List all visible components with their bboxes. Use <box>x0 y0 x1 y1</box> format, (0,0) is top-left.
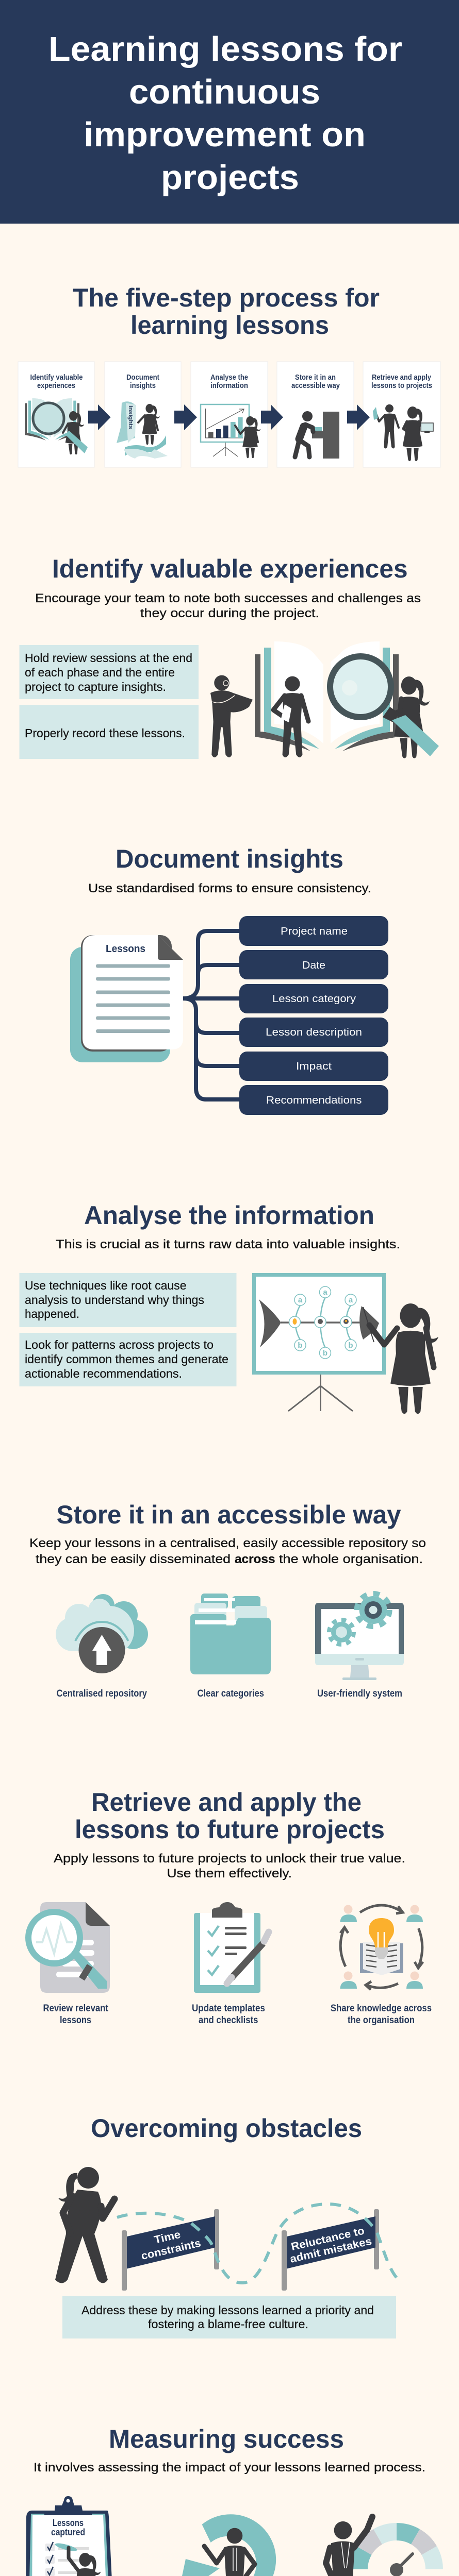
callout: review sessions <box>20 645 199 699</box>
section heading: document insights <box>88 844 371 895</box>
section heading: identify valuable experiences: Identify valuable experiences <box>52 554 408 583</box>
header banner with title: continuous <box>129 73 320 111</box>
section heading: document insights: Document insights <box>116 844 343 873</box>
icon: lessons document: Lessons <box>106 943 145 955</box>
section heading: analyse the information: Analyse the information <box>84 1201 374 1230</box>
section heading: measuring success: Measuring success <box>109 2425 344 2453</box>
label: user-friendly system: User-friendly system <box>317 1688 402 1699</box>
section heading: measuring success: It involves assessing the impact of your lessons learned process. <box>34 2461 425 2475</box>
callout: review sessions: Hold review sessions at the end <box>25 651 192 665</box>
icon: document with magnifier <box>28 1902 110 1993</box>
section heading: store it: they can be easily disseminated <box>36 1552 231 1566</box>
callout: review sessions: of each phase and the entire <box>25 666 175 679</box>
illustration: woman and barriers <box>55 2167 400 2291</box>
barrier: reluctance <box>282 2209 379 2291</box>
woman walking <box>55 2167 114 2283</box>
step card: document insights: Document <box>126 374 159 382</box>
callout: address obstacles: Address these by making lessons learned a priority and <box>81 2303 374 2317</box>
section heading: identify valuable experiences: Encourage your team to note both successes and challenges as <box>35 591 421 605</box>
barrier: reluctance: Reluctance to <box>290 2225 366 2253</box>
field: lesson description: Lesson description <box>266 1027 362 1038</box>
section heading: store it <box>29 1500 426 1566</box>
callout: root cause analysis <box>20 1273 236 1327</box>
step card: analyse the information: Analyse the <box>210 374 248 382</box>
field: project name: Project name <box>281 926 348 937</box>
header banner with title <box>0 0 459 224</box>
fishbone diagram: b <box>323 1349 327 1358</box>
icon: lessons document <box>70 935 183 1062</box>
section heading: retrieve and apply: Use them effectively. <box>167 1867 292 1880</box>
callout: patterns: actionable recommendations. <box>25 1367 182 1380</box>
header banner with title: improvement on <box>84 115 366 154</box>
step card: document insights: Insights <box>127 405 134 429</box>
fishbone diagram: b <box>348 1341 353 1350</box>
fishbone diagram <box>259 1286 379 1359</box>
field: lesson category: Lesson category <box>272 993 356 1005</box>
step card: analyse the information <box>191 362 268 467</box>
section heading: retrieve and apply: Apply lessons to future projects to unlock their true value. <box>54 1852 405 1866</box>
header banner with title: projects <box>161 158 299 197</box>
barrier: time constraints <box>122 2209 219 2291</box>
label: share knowledge <box>331 2003 432 2026</box>
five-step process diagram <box>18 362 440 467</box>
field: project name <box>239 916 388 946</box>
callout: patterns <box>20 1333 236 1386</box>
step card: identify valuable experiences <box>18 362 94 467</box>
section heading: identify valuable experiences <box>35 554 421 620</box>
label: clear categories: Clear categories <box>197 1688 264 1699</box>
step card: identify valuable experiences: Identify valuable <box>30 374 83 382</box>
fishbone diagram: a <box>349 1296 353 1304</box>
callout: record lessons: Properly record these lessons. <box>25 726 185 740</box>
icon: lessons captured clipboard: captured <box>51 2527 85 2537</box>
field: date: Date <box>302 960 325 971</box>
arrow 3 <box>261 404 283 430</box>
label: share knowledge: Share knowledge across <box>331 2003 432 2014</box>
step card: document insights <box>105 362 181 467</box>
callout: review sessions: project to capture insights. <box>25 680 166 693</box>
field: impact: Impact <box>296 1061 332 1072</box>
icon: lessons captured clipboard <box>26 2496 113 2576</box>
icon: gauge with man <box>326 2517 443 2576</box>
man with glasses <box>210 675 253 757</box>
section heading: store it: across <box>235 1552 275 1566</box>
woman holding magnifier <box>389 676 430 758</box>
callout: root cause analysis: Use techniques like root cause <box>25 1279 187 1292</box>
icon: folders <box>190 1594 271 1674</box>
label: centralised repository: Centralised repository <box>57 1688 147 1699</box>
section heading: identify valuable experiences: they occur during the project. <box>140 606 319 620</box>
section heading: retrieve and apply: lessons to future projects <box>75 1815 385 1844</box>
label: review relevant lessons <box>43 2003 109 2026</box>
dashed path <box>117 2204 400 2283</box>
step card: analyse the information: information <box>210 382 248 390</box>
icon: share knowledge <box>340 1905 423 1990</box>
step card: retrieve and apply lessons: lessons to projects <box>371 382 432 390</box>
step card: store it in an accessible way: accessible way <box>291 382 340 390</box>
field: recommendations <box>239 1085 388 1115</box>
centre man with notebook <box>273 676 308 757</box>
label: share knowledge: the organisation <box>348 2015 415 2026</box>
label: update templates: Update templates <box>192 2003 265 2014</box>
step card: store it in an accessible way <box>277 362 354 467</box>
arrow 1 <box>88 404 110 430</box>
field: impact <box>239 1052 388 1081</box>
section heading: store it: the whole organisation. <box>279 1552 423 1566</box>
fishbone diagram: a <box>323 1288 327 1297</box>
step card: retrieve and apply lessons: Retrieve and apply <box>372 374 431 382</box>
connector tree <box>183 931 239 1099</box>
section heading: document insights: Use standardised forms to ensure consistency. <box>88 882 371 895</box>
icon: cloud upload <box>56 1594 148 1673</box>
label: review relevant lessons: Review relevant <box>43 2003 109 2014</box>
callout: record lessons <box>20 705 199 759</box>
fishbone diagram: b <box>298 1341 303 1350</box>
section heading: analyse the information: This is crucial as it turns raw data into valuable insights. <box>56 1238 400 1251</box>
step card: document insights: insights <box>130 382 156 390</box>
label: review relevant lessons: lessons <box>60 2015 91 2026</box>
presenter woman <box>363 1303 438 1414</box>
icon: clipboard checklist <box>194 1902 269 1993</box>
barrier: time constraints: constraints <box>140 2237 202 2262</box>
heading: five-step process: The five-step process for <box>73 283 380 312</box>
field: recommendations: Recommendations <box>266 1095 362 1106</box>
form fields list <box>239 916 388 1115</box>
icon: monitor with gears <box>315 1594 404 1680</box>
callout: root cause analysis: happened. <box>25 1307 79 1320</box>
icon: lessons captured clipboard: Lessons <box>53 2518 84 2528</box>
heading: five-step process: learning lessons <box>130 311 329 340</box>
field: date <box>239 950 388 979</box>
heading: five-step process <box>73 283 380 340</box>
label: update templates: and checklists <box>199 2015 258 2026</box>
arrow 2 <box>174 404 197 430</box>
section heading: overcoming obstacles: Overcoming obstacles <box>91 2114 362 2143</box>
section heading: measuring success <box>34 2425 425 2475</box>
callout: address obstacles <box>62 2296 396 2338</box>
field: lesson category <box>239 984 388 1013</box>
callout: address obstacles: fostering a blame-free culture. <box>148 2317 308 2331</box>
step card: identify valuable experiences: experiences <box>37 382 75 390</box>
step card: store it in an accessible way: Store it in an <box>295 374 336 382</box>
section heading: retrieve and apply: Retrieve and apply the <box>91 1788 362 1817</box>
barrier: time constraints: Time <box>153 2229 182 2246</box>
barrier: reluctance: admit mistakes <box>289 2235 373 2265</box>
woman writing <box>69 2548 101 2576</box>
field: lesson description <box>239 1018 388 1047</box>
section heading: retrieve and apply <box>54 1788 405 1880</box>
arrow 4 <box>347 404 370 430</box>
callout: patterns: identify common themes and generate <box>25 1352 228 1366</box>
header banner with title: Learning lessons for <box>48 30 402 69</box>
section heading: analyse the information <box>56 1201 400 1251</box>
fishbone diagram: a <box>298 1296 303 1304</box>
callout: root cause analysis: analysis to understand why things <box>25 1293 204 1307</box>
illustration: fishbone board and presenter <box>252 1273 438 1414</box>
section heading: store it: Store it in an accessible way <box>57 1500 401 1529</box>
label: update templates <box>192 2003 265 2026</box>
step card: retrieve and apply lessons <box>363 362 440 467</box>
icon: circular arrow with man <box>178 2514 276 2576</box>
illustration: team with book and magnifier <box>210 641 439 758</box>
callout: patterns: Look for patterns across projects to <box>25 1338 214 1351</box>
section heading: store it: Keep your lessons in a centralised, easily accessible repository so <box>29 1536 426 1550</box>
